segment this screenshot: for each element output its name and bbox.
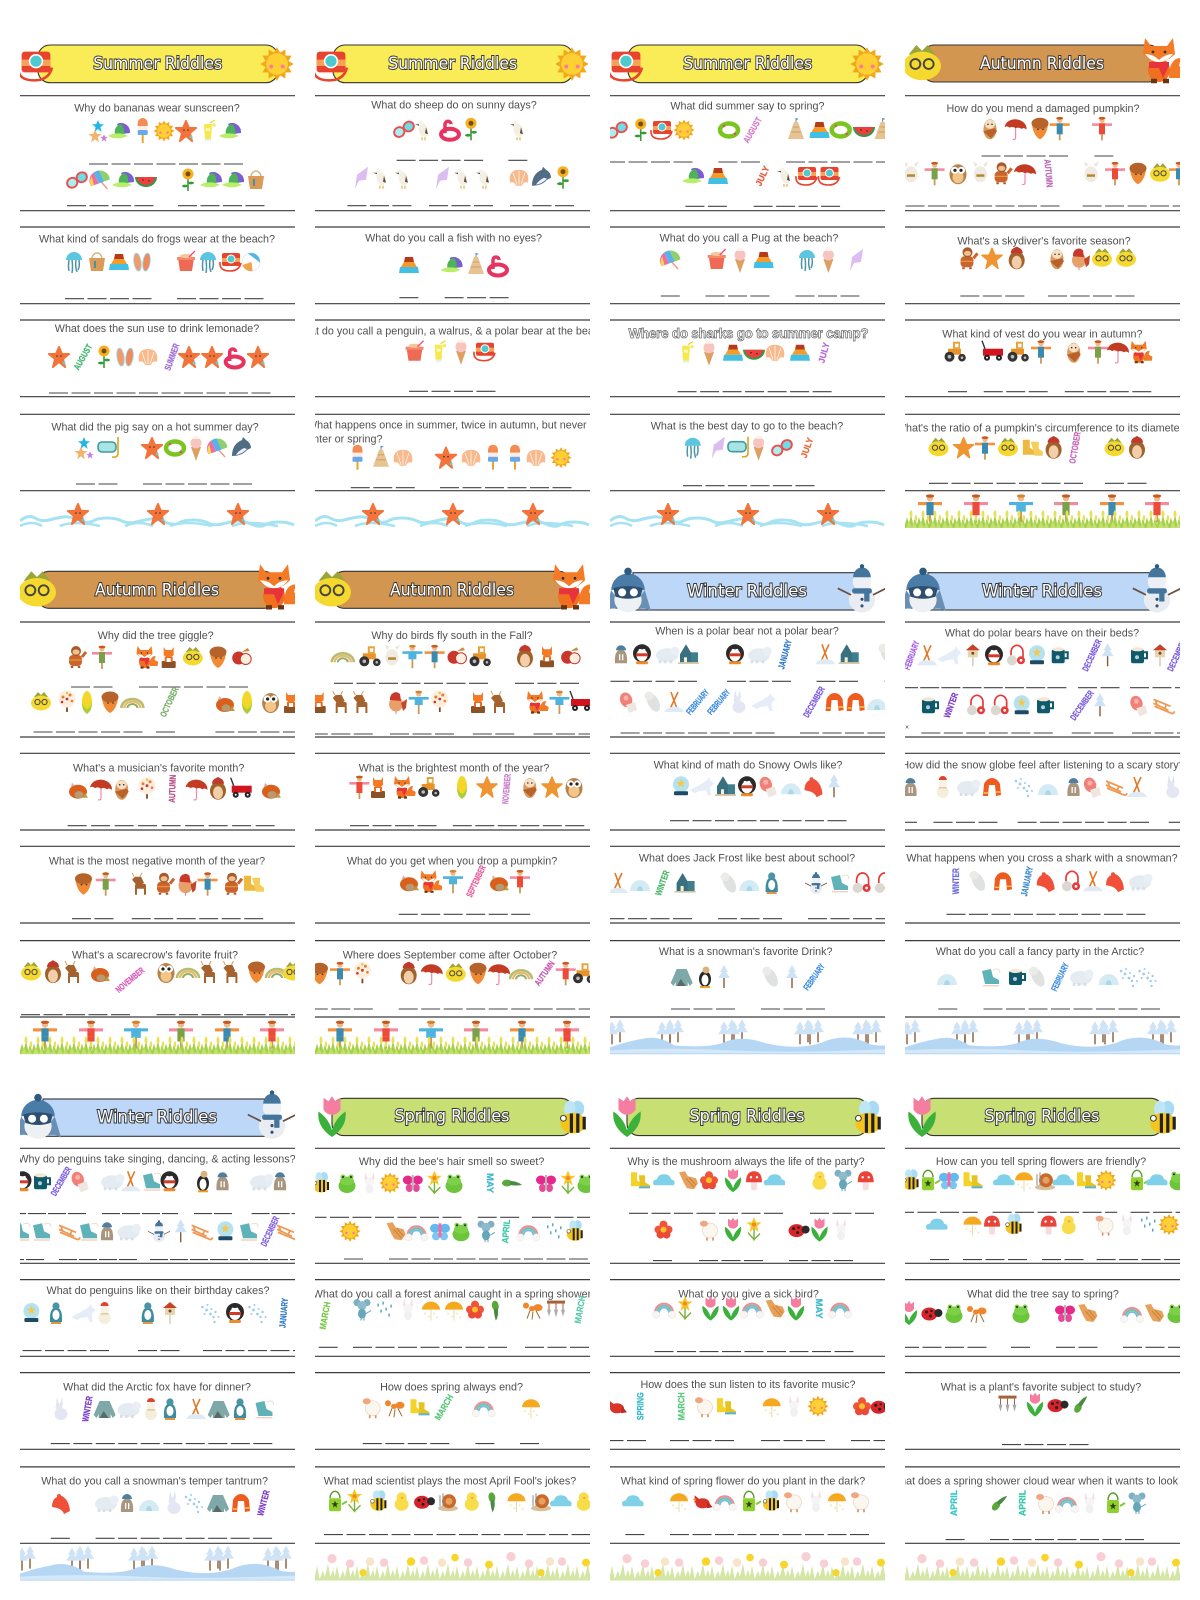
heading banner: Summer Riddles (683, 54, 812, 74)
riddle 3: What did the Arctic fox have for dinner? (63, 1381, 251, 1393)
riddle 2: What did the tree say to spring? (967, 1289, 1119, 1301)
riddle 4 (309, 949, 598, 1009)
footer border: snowy hills (606, 1019, 885, 1054)
riddle 1: Why do penguins take singing, dancing, & acting lessons? (18, 1153, 296, 1165)
riddle 3 (363, 1381, 540, 1444)
riddle 2 (652, 1289, 854, 1352)
riddle 3: JULY (816, 341, 832, 364)
footer border: scarecrows in corn (905, 494, 1180, 528)
riddle 3 (941, 1381, 1141, 1445)
footer border: flower meadow (315, 1552, 590, 1581)
footer border: waves (20, 504, 294, 526)
riddle 1: JANUARY (776, 639, 794, 670)
riddle 4: What's the ratio of a pumpkin's circumference to its diameter? (896, 422, 1189, 434)
heading banner (18, 564, 302, 608)
riddle 3: What is the most negative month of the year? (49, 855, 265, 867)
riddle 1: APRIL (500, 1218, 512, 1244)
riddle 4: What did the pig say on a hot summer day? (51, 422, 259, 434)
heading banner (903, 38, 1187, 82)
riddle 1 (347, 99, 574, 206)
footer border: scarecrows in corn (315, 1021, 590, 1054)
riddle 3 (347, 855, 557, 914)
riddle 4: winter or spring? (302, 433, 382, 445)
panel: Summer Riddles 3 (605, 45, 895, 526)
riddle 1: DECEMBER (801, 684, 827, 719)
riddle 1: What did summer say to spring? (670, 100, 824, 112)
riddle 2: What do you give a sick bird? (678, 1289, 819, 1301)
riddle 1: How do you mend a damaged pumpkin? (946, 103, 1140, 115)
riddle 1 (6, 1153, 300, 1260)
riddle 4 (302, 419, 598, 488)
riddle 2: How did the snow globe feel after listening to a scary story? (901, 759, 1185, 771)
riddle 1: WINTER (942, 691, 960, 719)
riddle 3: MARCH (433, 1393, 455, 1422)
riddle 2: What kind of sandals do frogs wear at the beach? (39, 234, 275, 246)
riddle 3 (49, 323, 270, 393)
riddle 3: AUGUST (72, 342, 95, 372)
riddle 1: How can you tell spring flowers are friendly? (936, 1156, 1146, 1168)
riddle 2: What do you call a fish with no eyes? (365, 232, 542, 244)
riddle 4: What do you call a snowman's temper tantrum? (41, 1475, 268, 1487)
heading banner (605, 564, 886, 612)
riddle 4: What does a spring shower cloud wear when it wants to look (890, 1475, 1179, 1487)
riddle 3: What is a plant's favorite subject to study? (941, 1381, 1141, 1393)
riddle 1: What do polar bears have on their beds? (945, 628, 1139, 640)
riddle 2: JANUARY (277, 1298, 290, 1328)
riddle 1 (65, 103, 264, 206)
riddle 3: What do you call a penguin, a walrus, & a polar bear at the beach? (294, 326, 611, 338)
riddle 1: JULY (754, 164, 771, 188)
riddle 2: What do you call a forest animal caught in a spring shower (313, 1289, 592, 1301)
riddle 4: What is a snowman's favorite Drink? (659, 946, 832, 958)
riddle 3: Where do sharks go to summer camp? (628, 326, 868, 341)
riddle 3: What does the sun use to drink lemonade? (55, 323, 259, 335)
riddle 1 (627, 1156, 874, 1261)
heading banner: Autumn Riddles (390, 580, 514, 600)
heading banner (908, 1096, 1176, 1137)
riddle 4 (41, 1475, 272, 1538)
riddle 1: What do sheep do on sunny days? (371, 99, 537, 111)
heading banner (900, 564, 1181, 612)
riddle 1: Why did the bee's hair smell so sweet? (359, 1156, 544, 1168)
heading banner: Spring Riddles (690, 1107, 805, 1127)
riddle 1 (895, 1156, 1195, 1260)
riddle 2 (900, 1289, 1187, 1347)
riddle 1 (605, 100, 895, 206)
riddle 2: What's a musician's favorite month? (73, 762, 244, 774)
riddle 4: AUTUMN (532, 959, 557, 988)
riddle 2 (39, 234, 275, 299)
riddle 3 (906, 853, 1178, 914)
panel: Winter Riddles 1 (605, 564, 904, 1054)
riddle 4: Where does September come after October? (343, 949, 557, 961)
riddle 2: MARCH (318, 1301, 332, 1330)
riddle 4: JULY (799, 436, 815, 459)
riddle 2: MARCH (573, 1295, 587, 1324)
riddle 3: MARCH (676, 1392, 686, 1420)
riddle 1: AUGUST (741, 115, 764, 145)
riddle 4: OCTOBER (1067, 431, 1083, 464)
heading banner: Winter Riddles (687, 581, 807, 601)
heading banner (318, 1096, 586, 1137)
panel: Spring Riddles 2 (604, 1096, 892, 1581)
footer border: flower meadow (905, 1552, 1180, 1581)
riddle 3: What does Jack Frost like best about school? (639, 853, 855, 865)
riddle 1: DECEMBER (1165, 637, 1189, 673)
riddle 2: MAY (814, 1299, 824, 1319)
riddle 1: DECEMBER (259, 1214, 281, 1248)
heading banner: Autumn Riddles (95, 580, 219, 600)
riddle 2 (957, 235, 1136, 296)
riddle 1 (899, 628, 1196, 733)
heading banner: Summer Riddles (93, 54, 222, 74)
riddle 1: DECEMBER (49, 1165, 73, 1198)
riddle 1: × (905, 724, 909, 731)
riddle 4 (936, 946, 1160, 1009)
riddle 4 (51, 422, 259, 484)
panel: Winter Riddles 2 (898, 564, 1196, 1054)
riddle 4 (621, 1475, 869, 1535)
riddle 4 (651, 420, 843, 486)
riddle 1: Why did the tree giggle? (98, 630, 214, 642)
riddle 2: What do you call a Pug at the beach? (660, 232, 838, 244)
riddle 2: NOVEMBER (500, 773, 513, 804)
heading banner: Spring Riddles (394, 1107, 510, 1127)
panel: Autumn Riddles 3 (309, 564, 598, 1054)
riddle 2: What do penguins like on their birthday cakes? (47, 1285, 269, 1297)
panel: Summer Riddles 1 (18, 45, 295, 526)
riddle 4: What is the best day to go to the beach? (651, 420, 843, 432)
riddle 4: FEBRUARY (1049, 961, 1071, 993)
heading banner (608, 45, 884, 83)
riddle 3: What happens when you cross a shark with a snowman? (906, 853, 1178, 865)
riddle 2: What is the brightest month of the year? (359, 762, 549, 774)
riddle 4 (890, 1475, 1179, 1540)
riddle 2 (68, 762, 281, 826)
riddle 3 (51, 1381, 273, 1444)
footer border: scarecrows in corn (20, 1021, 295, 1054)
riddle 1: Why do birds fly south in the Fall? (371, 630, 533, 642)
riddle 4: What's a scarecrow's favorite fruit? (72, 949, 238, 961)
riddle 3: What do you get when you drop a pumpkin? (347, 855, 557, 867)
heading banner (18, 45, 294, 83)
footer border: waves (315, 504, 589, 526)
riddle 3: How does spring always end? (380, 1381, 523, 1393)
heading banner: Winter Riddles (982, 581, 1102, 601)
heading banner: Spring Riddles (984, 1107, 1100, 1127)
panel: Autumn Riddles 1 (896, 38, 1192, 528)
riddle 3 (606, 853, 894, 919)
riddle 3 (942, 328, 1153, 392)
riddle 3: SUMMER (163, 342, 182, 372)
riddle 2: AUTUMN (167, 775, 178, 803)
riddle 2 (657, 232, 863, 296)
riddle 4: What do you call a fancy party in the Arctic? (936, 946, 1144, 958)
riddle 2 (349, 762, 584, 826)
riddle 4: APRIL (949, 1490, 959, 1516)
riddle 3: SPRING (635, 1392, 645, 1420)
heading banner (313, 564, 597, 608)
riddle 1 (904, 103, 1192, 206)
riddle 2 (898, 759, 1188, 822)
riddle 3: WINTER (653, 869, 672, 897)
riddle 1: AUTUMN (1042, 159, 1055, 188)
panel: Autumn Riddles 2 (18, 564, 310, 1054)
heading banner: Winter Riddles (97, 1108, 217, 1128)
heading banner: Summer Riddles (388, 54, 517, 74)
footer border: snowy hills (901, 1019, 1180, 1054)
riddle 1 (31, 630, 302, 732)
footer border: flower meadow (610, 1552, 885, 1581)
riddle 3 (315, 326, 590, 392)
heading banner (613, 1096, 881, 1137)
riddle 1 (308, 1156, 596, 1259)
riddle 1 (610, 626, 904, 733)
riddle 3: SEPTEMBER (464, 864, 488, 899)
riddle 4: NOVEMBER (114, 965, 146, 995)
panel: Winter Riddles 3 (6, 1090, 312, 1581)
riddle 3: What kind of vest do you wear in autumn? (942, 328, 1143, 340)
riddle 1: FEBRUARY (902, 639, 922, 671)
riddle 4: What mad scientist plays the most April Fool's jokes? (324, 1475, 576, 1487)
riddle 4 (324, 1475, 591, 1535)
riddle 1: Why do bananas wear sunscreen? (74, 103, 240, 115)
riddle 4: FEBRUARY (801, 962, 827, 992)
heading banner (15, 1090, 296, 1139)
riddle 1: OCTOBER (158, 685, 181, 719)
riddle 3 (628, 326, 868, 392)
footer border: snowy hills (16, 1546, 295, 1581)
riddle 4: What happens once in summer, twice in autumn, but never in (307, 419, 598, 431)
riddle 2: What's a skydiver's favorite season? (957, 235, 1131, 247)
riddle 3: WINTER (951, 868, 961, 894)
riddle 3: JANUARY (1019, 866, 1035, 897)
riddle 1: DECEMBER (1080, 637, 1104, 673)
riddle 4: WINTER (255, 1489, 272, 1517)
riddle 2 (365, 232, 542, 298)
riddle 3 (604, 1379, 892, 1441)
riddle 2 (22, 1285, 312, 1351)
panel: Spring Riddles 3 (890, 1096, 1195, 1581)
riddle 1: FEBRUARY (684, 687, 711, 717)
riddle 2 (313, 1289, 592, 1347)
riddle 3: WINTER (80, 1395, 95, 1423)
riddle 4 (659, 946, 832, 1009)
riddle 1: Why is the mushroom always the life of the party? (627, 1156, 865, 1168)
riddle 1: When is a polar bear not a polar bear? (655, 626, 839, 638)
riddle 3: How does the sun listen to its favorite music? (640, 1379, 856, 1391)
riddle 1: DECEMBER (1068, 688, 1096, 722)
heading banner (313, 45, 589, 83)
riddle 4: APRIL (1018, 1490, 1028, 1516)
panel: Summer Riddles 2 (315, 44, 590, 528)
riddle 1 (309, 630, 598, 734)
riddle 4 (21, 949, 310, 1015)
riddle 1: MAY (485, 1173, 495, 1193)
footer border: waves (610, 504, 884, 526)
riddle 2 (654, 759, 846, 821)
riddle 3 (49, 855, 265, 919)
riddle 2: What kind of math do Snowy Owls like? (654, 759, 842, 771)
riddle 4: What kind of spring flower do you plant in the dark? (621, 1475, 865, 1487)
riddle 4 (896, 422, 1189, 483)
panel: Spring Riddles 1 (308, 1096, 596, 1581)
riddle 1: FEBRUARY (705, 687, 732, 717)
heading banner: Autumn Riddles (980, 54, 1104, 74)
